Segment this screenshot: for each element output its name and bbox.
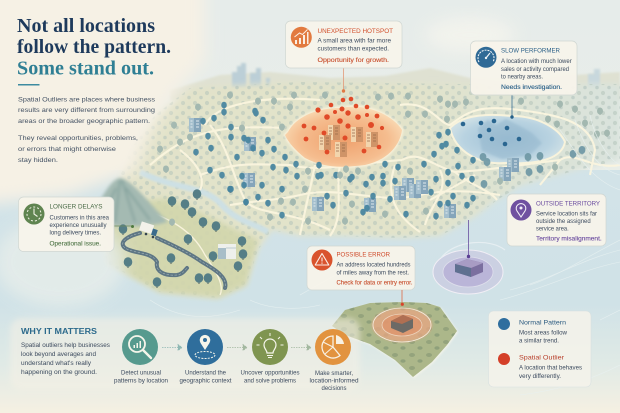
slow performer callout: A location with much lower bbox=[501, 59, 572, 65]
outside territory site with rings bbox=[433, 242, 505, 294]
hotspot callout: customers than expected. bbox=[318, 46, 389, 52]
why it matters text: Spatial outliers help businesses bbox=[21, 343, 110, 349]
why it matters text: understand what's really bbox=[21, 361, 91, 367]
legend: normal pattern: Most areas follow bbox=[519, 330, 568, 336]
why it matters text bbox=[21, 343, 110, 376]
possible error callout: An address located hundreds bbox=[336, 262, 410, 268]
mountain bbox=[85, 178, 168, 226]
outline of the slow performer area bbox=[450, 115, 565, 163]
step 1: detect: patterns by location bbox=[114, 378, 168, 384]
slow performer callout: Needs investigation. bbox=[501, 84, 562, 91]
icon: speedometer bbox=[476, 47, 496, 68]
intro text bbox=[18, 96, 156, 164]
step 4: decisions: location-informed bbox=[310, 378, 358, 384]
why it matters text: look beyond averages and bbox=[21, 352, 96, 358]
step 2: context bbox=[180, 329, 232, 384]
icon: warning triangle bbox=[312, 250, 332, 270]
step 2: context: Understand the bbox=[185, 370, 227, 376]
longer delays callout: experience unusually bbox=[50, 223, 106, 229]
possible error callout: of miles away from the rest. bbox=[336, 270, 409, 276]
legend: spatial outlier bbox=[498, 353, 582, 380]
intro text: They reveal opportunities, problems, bbox=[18, 135, 138, 142]
leader line: hotspot bbox=[342, 68, 345, 93]
step 2: context: geographic context bbox=[180, 378, 232, 384]
step 3: uncover: Uncover opportunities bbox=[240, 370, 300, 376]
legend: spatial outlier: Spatial Outlier bbox=[519, 354, 565, 362]
red hotspot markers bbox=[302, 97, 384, 154]
step 1: detect bbox=[114, 329, 168, 384]
possible error callout: Check for data or entry error. bbox=[336, 280, 413, 286]
hotspot callout: A small area with far more bbox=[318, 38, 392, 44]
intro text: Spatial Outliers are places where business bbox=[18, 96, 156, 104]
icon: delivery truck bbox=[139, 221, 158, 238]
island bbox=[332, 302, 458, 378]
fade over map left edge bbox=[0, 0, 205, 307]
possible error callout bbox=[307, 246, 415, 290]
intro text: or errors that might otherwise bbox=[18, 146, 116, 153]
icon: location pin in circle bbox=[510, 200, 532, 220]
heading: Not all locations bbox=[17, 15, 155, 37]
outside territory callout: Service location sits far bbox=[536, 212, 597, 218]
intro text: results are very different from surrounding bbox=[18, 107, 155, 114]
slow performer callout: SLOW PERFORMER bbox=[501, 48, 560, 54]
step 4: decisions bbox=[310, 329, 358, 392]
leader line: slow performer bbox=[510, 95, 514, 119]
icon: rising chart bbox=[291, 27, 312, 48]
heading: follow the pattern. bbox=[17, 36, 171, 58]
outline of the hotspot area bbox=[285, 107, 402, 167]
outside territory callout: OUTSIDE TERRITORY bbox=[536, 200, 601, 208]
legend: normal pattern bbox=[498, 318, 568, 344]
why it matters panel bbox=[10, 318, 360, 392]
legend: spatial outlier: A location that behaves bbox=[519, 366, 582, 372]
arrow bbox=[227, 344, 247, 350]
icon: clock bbox=[24, 204, 44, 224]
step 4: decisions: Make smarter, bbox=[315, 371, 353, 377]
arrow bbox=[291, 344, 311, 350]
step 4: decisions: decisions bbox=[321, 386, 347, 392]
legend: normal pattern: a similar trend. bbox=[519, 338, 559, 344]
sea ripple lines bbox=[150, 115, 620, 395]
arrow bbox=[162, 344, 182, 350]
longer delays callout: long delivery times. bbox=[50, 230, 101, 236]
intro text: stay hidden. bbox=[18, 157, 58, 164]
blue normal-pattern trees bbox=[193, 102, 585, 220]
dark blue slow-performer markers bbox=[461, 119, 521, 146]
outside territory callout bbox=[507, 194, 606, 246]
possible error callout: POSSIBLE ERROR bbox=[336, 252, 390, 258]
hotspot callout: UNEXPECTED HOTSPOT bbox=[318, 28, 393, 35]
step 1: detect: Detect unusual bbox=[121, 370, 161, 376]
map buildings bbox=[189, 118, 519, 218]
why it matters text: happening on the ground. bbox=[21, 370, 97, 376]
road network bbox=[130, 99, 620, 295]
pale background trees bbox=[157, 92, 610, 225]
main land mass bbox=[96, 82, 620, 298]
winding delivery road bbox=[123, 233, 225, 288]
longer delays callout: Operational issue. bbox=[50, 240, 101, 248]
delay-area trees and building bbox=[119, 186, 249, 288]
leader line: outside territory bbox=[467, 220, 470, 258]
slow performer callout: sales or activity compared bbox=[501, 67, 569, 73]
why it matters panel: WHY IT MATTERS bbox=[21, 326, 97, 336]
hotspot callout: Opportunity for growth. bbox=[318, 57, 389, 64]
river bbox=[140, 172, 268, 232]
longer delays callout: LONGER DELAYS bbox=[50, 204, 103, 210]
legend panel bbox=[488, 311, 591, 387]
longer delays callout bbox=[18, 197, 114, 252]
longer delays callout: Customers in this area bbox=[50, 216, 110, 222]
heading bbox=[17, 15, 171, 80]
leader line: possible error bbox=[401, 290, 404, 306]
outside territory callout: outside the assigned bbox=[536, 219, 591, 225]
legend: spatial outlier: very differently. bbox=[519, 374, 561, 380]
step 3: uncover: and solve problems bbox=[244, 378, 296, 384]
hotspot callout bbox=[286, 21, 402, 68]
legend: normal pattern: Normal Pattern bbox=[519, 320, 566, 326]
step 3: uncover bbox=[240, 329, 300, 384]
slow performer callout bbox=[470, 41, 577, 95]
outside territory callout: service area. bbox=[536, 226, 569, 232]
outside territory callout: Territory misalignment. bbox=[536, 236, 602, 242]
distant hills and skyline bbox=[170, 63, 620, 100]
leader line: longer delays bbox=[114, 225, 134, 228]
heading: Some stand out. bbox=[17, 58, 154, 80]
intro text: areas or the broader geographic pattern. bbox=[18, 118, 150, 125]
slow performer callout: to nearby areas. bbox=[501, 74, 543, 80]
